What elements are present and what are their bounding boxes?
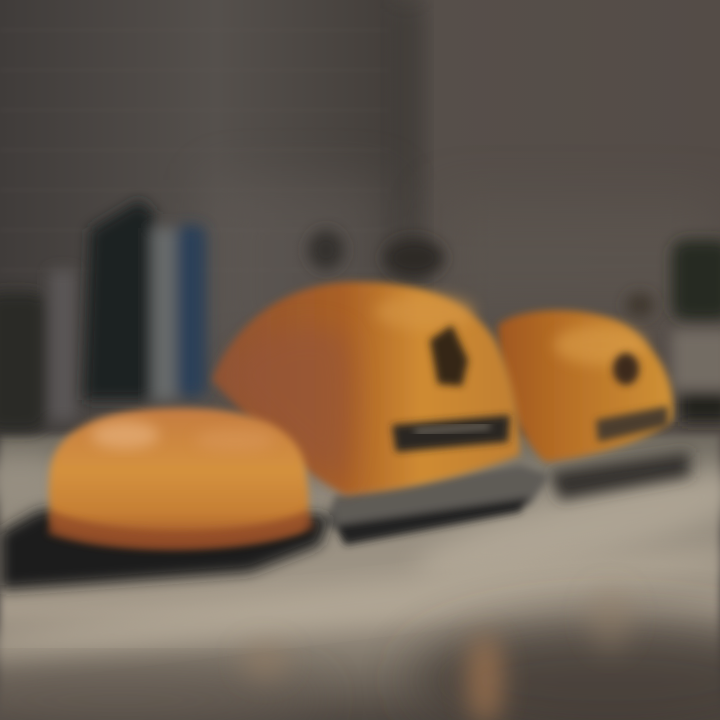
first toaster highlight [375, 294, 475, 330]
first toaster [212, 282, 520, 495]
second toaster highlight [554, 325, 646, 365]
second toaster [498, 310, 673, 462]
background wall [0, 0, 720, 470]
first toaster side shading [225, 327, 352, 485]
right side appliance [672, 330, 720, 422]
second toaster base [550, 452, 690, 500]
second toaster slot [596, 406, 668, 442]
countertop [0, 435, 720, 720]
first toaster base [325, 465, 550, 545]
reflections on counter [241, 588, 632, 720]
left dark kettle [0, 270, 76, 432]
first toaster slot [392, 415, 510, 452]
background knobs [308, 230, 654, 317]
coffee pot [84, 200, 206, 400]
cake lower band [48, 510, 314, 550]
front plate shadow [0, 510, 330, 590]
green plant [672, 240, 720, 320]
front round cake [48, 408, 314, 550]
first toaster emblem [430, 325, 468, 386]
cake highlight [91, 421, 159, 449]
second toaster emblem [613, 353, 639, 385]
